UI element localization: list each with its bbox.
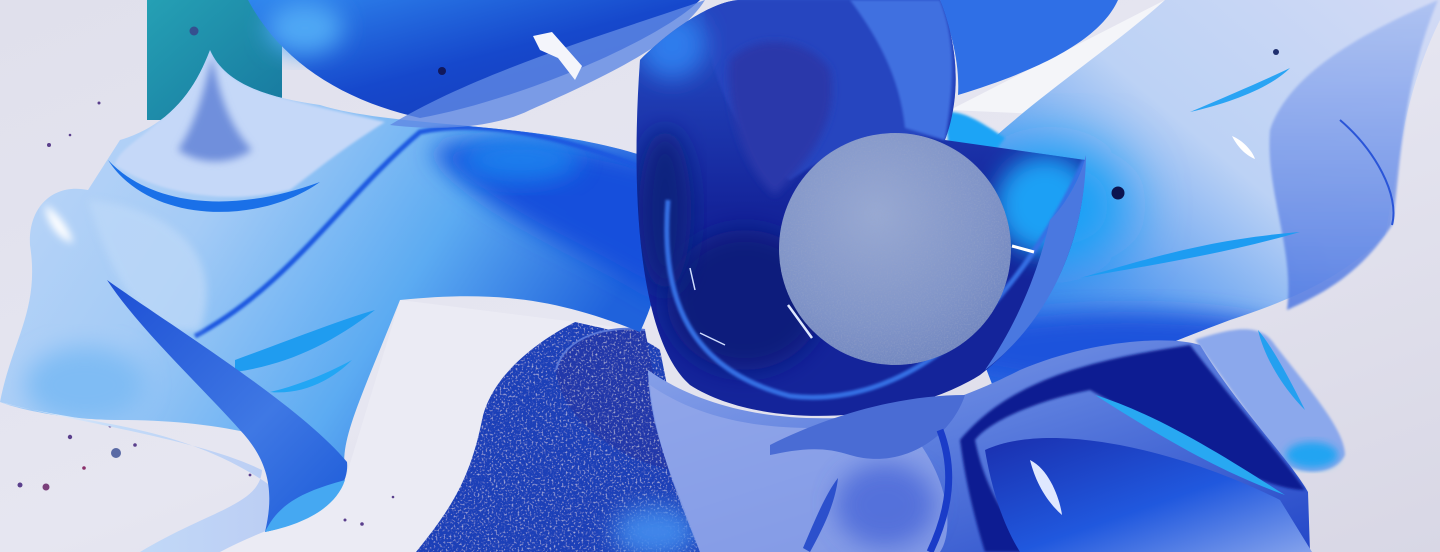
curl shadow [178, 55, 252, 161]
cyan glow right of sphere [995, 155, 1095, 255]
central dark blue bloom [637, 0, 1095, 416]
dark well [667, 230, 823, 370]
cyan streak [1095, 395, 1285, 495]
right wrap over sphere [985, 155, 1086, 370]
white highlight [1232, 136, 1255, 159]
dark droplet [438, 67, 446, 75]
bottom glass petals [648, 340, 1312, 552]
deep blue glow [430, 140, 668, 300]
cyan wedge beside bloom [945, 112, 1005, 165]
right glass lobe [1269, 0, 1438, 310]
blue ring [930, 430, 949, 552]
petal crease [803, 478, 838, 552]
upper petal [705, 0, 957, 180]
white glow behind centre [200, 0, 1165, 552]
left glass ribbon [0, 50, 668, 470]
left highlight [45, 205, 73, 243]
bright blue upper-left fold [638, 11, 706, 79]
lobe edge line [1340, 120, 1393, 225]
streak [1190, 68, 1290, 112]
upper lobe [115, 50, 385, 197]
top-left dark blue ribbon [248, 0, 700, 118]
diagonal glass strip [390, 0, 705, 128]
light left petal [650, 385, 947, 552]
inner rim [667, 160, 1085, 397]
dark creases [960, 345, 1305, 552]
top back ribbon right [940, 0, 1118, 95]
blue under lobe band [108, 160, 320, 212]
light petal edge [850, 0, 952, 140]
bottom textured blue form [416, 322, 700, 552]
light pane [88, 200, 207, 331]
cyan streaks [235, 310, 375, 372]
sheen [1030, 460, 1062, 515]
cyan streak lower [1080, 232, 1300, 278]
main blue crease [195, 128, 668, 336]
black droplet [1112, 186, 1124, 200]
cyan glow on right glass [970, 143, 1130, 267]
lower ribbon tail [0, 280, 347, 552]
lower right back lobe [1195, 329, 1345, 472]
teal square behind ribbons [147, 0, 282, 120]
purple petal [729, 42, 832, 195]
lower left blue glow [25, 347, 145, 423]
lower right petal [985, 438, 1312, 552]
blue shading in left petal [835, 463, 935, 547]
right translucent glass panel [986, 0, 1440, 384]
small droplet [1273, 49, 1279, 55]
white splash [533, 32, 582, 80]
deep blue base of panel [986, 296, 1268, 384]
textured grey-blue sphere [779, 133, 1011, 365]
gloss marks [788, 305, 812, 338]
centre blue ribbon [770, 395, 965, 459]
